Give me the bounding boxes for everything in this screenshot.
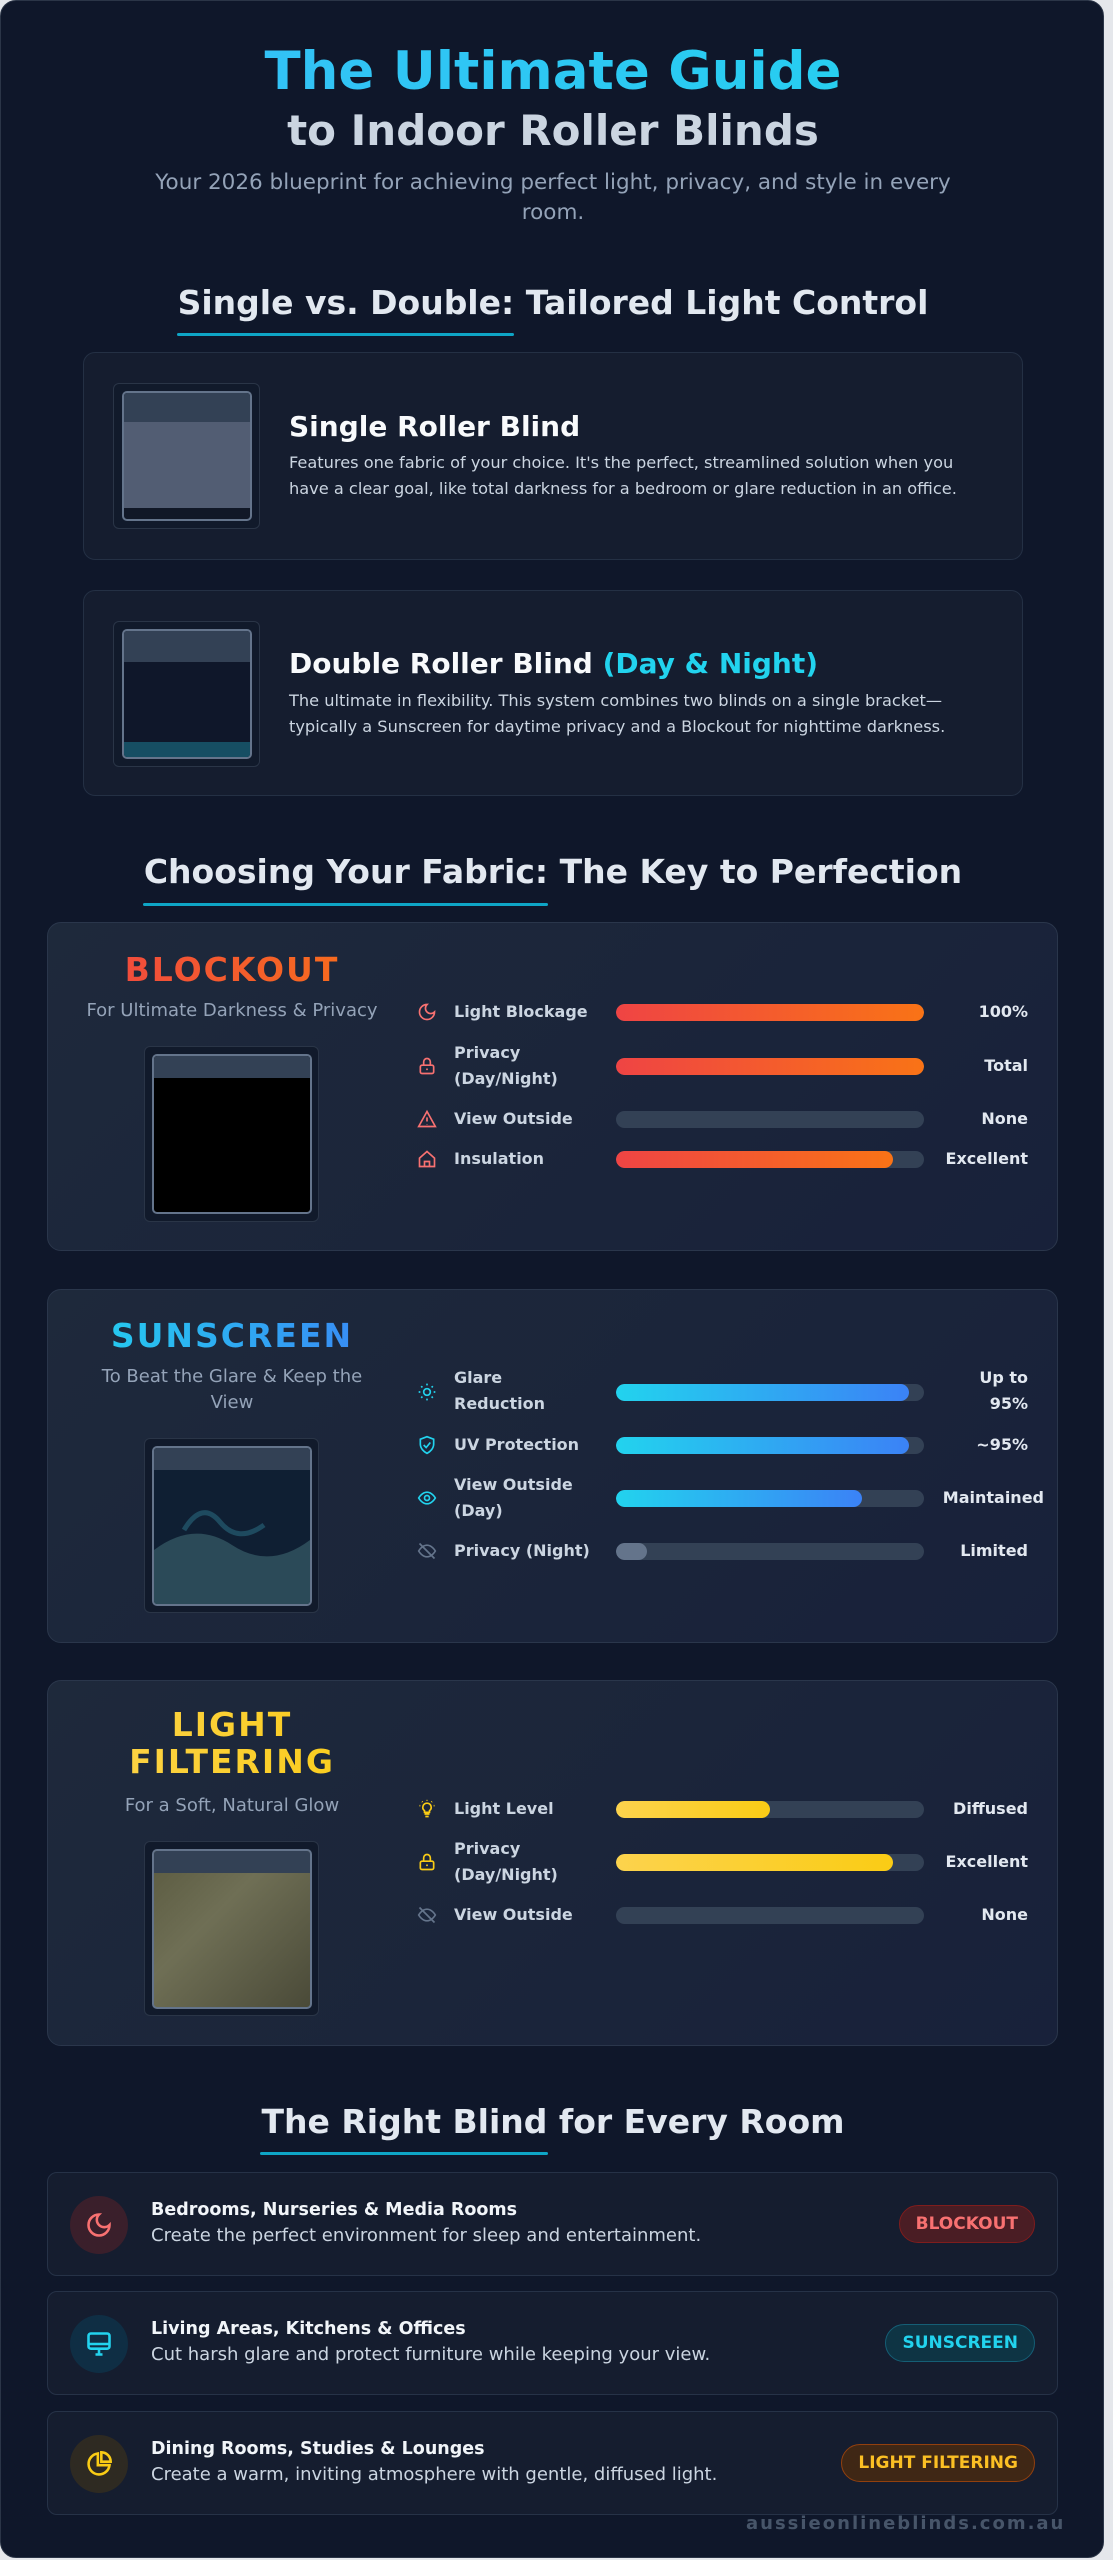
- light filtering metrics: Diffused: [953, 1799, 1028, 1818]
- icon: pie: [70, 2435, 128, 2493]
- panel: double roller blind: [83, 590, 1023, 796]
- badge: blockout: BLOCKOUT: [916, 2214, 1018, 2234]
- blockout metrics: Insulation: [454, 1149, 544, 1168]
- sunscreen image: [144, 1438, 319, 1613]
- double description: [288, 691, 945, 736]
- blockout metrics: Excellent: [946, 1149, 1028, 1168]
- room: bedrooms: Bedrooms, Nurseries & Media Rooms: [151, 2200, 517, 2220]
- badge: sunscreen: SUNSCREEN: [902, 2333, 1018, 2353]
- light filtering name: [62, 1706, 402, 1780]
- row: view day: [418, 1491, 436, 1505]
- sunscreen metrics: Privacy (Night): [454, 1541, 590, 1560]
- row: uv: [420, 1436, 434, 1454]
- intro text: [155, 170, 951, 225]
- double description: typically a Sunscreen for daytime privacy and a Blockout for nighttime darkness.: [289, 717, 945, 736]
- blockout metrics: [417, 1002, 1028, 1168]
- sunscreen subtitle: View: [211, 1392, 253, 1413]
- room: bedrooms: [47, 2172, 1058, 2276]
- sunscreen metrics: Up to: [979, 1368, 1028, 1387]
- heading: right blind for every room: The Right Blind for Every Room: [262, 2102, 844, 2141]
- blockout name: [62, 950, 402, 990]
- blockout metrics: (Day/Night): [454, 1069, 558, 1088]
- single description: [289, 453, 957, 498]
- light filtering metrics: [418, 1799, 1028, 1924]
- room: dining: Dining Rooms, Studies & Lounges: [151, 2439, 485, 2459]
- light filtering metrics: Excellent: [946, 1852, 1028, 1871]
- row: light blockage: [418, 1004, 436, 1020]
- light filtering metrics: (Day/Night): [454, 1865, 558, 1884]
- icon: single blind: [113, 383, 260, 529]
- blockout subtitle: For Ultimate Darkness & Privacy: [86, 1000, 378, 1021]
- sunscreen subtitle: [102, 1366, 362, 1413]
- row: insulation: [418, 1150, 436, 1168]
- footer url: aussieonlineblinds.com.au: [746, 2513, 1065, 2534]
- badge: sunscreen: [885, 2324, 1035, 2362]
- row: privacy: [420, 1854, 434, 1870]
- panel: sunscreen: [47, 1289, 1058, 1643]
- sunscreen subtitle: To Beat the Glare & Keep the: [102, 1366, 362, 1387]
- sunscreen metrics: UV Protection: [454, 1435, 579, 1454]
- icon: double blind: [113, 621, 260, 767]
- sunscreen metrics: 95%: [990, 1394, 1028, 1413]
- blockout metrics: Light Blockage: [454, 1002, 588, 1021]
- room: dining: [47, 2411, 1058, 2515]
- double title: Double Roller Blind (Day & Night): [289, 647, 818, 680]
- row: glare: [418, 1384, 436, 1400]
- blockout metrics: 100%: [979, 1002, 1028, 1021]
- light filtering subtitle: For a Soft, Natural Glow: [125, 1795, 339, 1816]
- room: bedrooms: Create the perfect environment for sleep and entertainment.: [151, 2225, 701, 2246]
- blockout metrics: Privacy: [454, 1043, 520, 1062]
- title: [1, 39, 1105, 105]
- badge: blockout: [899, 2205, 1035, 2243]
- single description: Features one fabric of your choice. It's the perfect, streamlined solution when you: [289, 453, 953, 472]
- sunscreen metrics: Glare: [454, 1368, 502, 1387]
- row: view outside: [417, 1110, 437, 1128]
- sunscreen metrics: ~95%: [976, 1435, 1028, 1454]
- room: living: Living Areas, Kitchens & Offices: [151, 2319, 466, 2339]
- blockout metrics: Total: [984, 1056, 1028, 1075]
- icon: monitor: [70, 2315, 128, 2373]
- room: living: [47, 2291, 1058, 2395]
- subtitle heading: to Indoor Roller Blinds: [287, 106, 819, 155]
- intro text: room.: [522, 200, 584, 225]
- panel: single roller blind: [83, 352, 1023, 560]
- blockout image: [144, 1046, 319, 1222]
- light filtering metrics: View Outside: [454, 1905, 573, 1924]
- title: The Ultimate Guide: [264, 41, 842, 102]
- sunscreen metrics: View Outside: [454, 1475, 573, 1494]
- icon: moon: [70, 2196, 128, 2254]
- panel: blockout: [47, 922, 1058, 1251]
- heading: choosing fabric: Choosing Your Fabric: The Key to Perfection: [144, 852, 962, 891]
- light filtering metrics: Light Level: [454, 1799, 554, 1818]
- light filtering name: LIGHT: [172, 1705, 292, 1744]
- blockout metrics: None: [981, 1109, 1028, 1128]
- panel: light filtering: [47, 1680, 1058, 2046]
- heading: single vs double: Single vs. Double: Tailored Light Control: [178, 283, 928, 322]
- blockout metrics: View Outside: [454, 1109, 573, 1128]
- row: privacy: [420, 1058, 434, 1074]
- double description: The ultimate in flexibility. This system combines two blinds on a single bracket—: [289, 691, 942, 710]
- sunscreen metrics: Reduction: [454, 1394, 545, 1413]
- sunscreen metrics: Maintained: [943, 1488, 1044, 1507]
- intro text: Your 2026 blueprint for achieving perfect light, privacy, and style in every: [155, 170, 951, 195]
- row: light level: [420, 1800, 434, 1818]
- sunscreen name: SUNSCREEN: [111, 1316, 353, 1355]
- row: view outside: [418, 1907, 436, 1923]
- sunscreen metrics: Limited: [960, 1541, 1028, 1560]
- light filtering metrics: None: [981, 1905, 1028, 1924]
- sunscreen metrics: [418, 1368, 1044, 1560]
- room: dining: Create a warm, inviting atmosphere with gentle, diffused light.: [151, 2464, 717, 2485]
- light filtering image: [144, 1841, 319, 2016]
- badge: light filtering: [841, 2444, 1035, 2482]
- light filtering metrics: Privacy: [454, 1839, 520, 1858]
- row: privacy night: [418, 1543, 436, 1559]
- room: living: Cut harsh glare and protect furniture while keeping your view.: [151, 2344, 710, 2365]
- blockout name: BLOCKOUT: [125, 950, 339, 989]
- light filtering name: FILTERING: [129, 1742, 335, 1781]
- badge: light filtering: LIGHT FILTERING: [858, 2453, 1018, 2473]
- single description: have a clear goal, like total darkness for a bedroom or glare reduction in an office.: [289, 479, 957, 498]
- sunscreen metrics: (Day): [454, 1501, 503, 1520]
- sunscreen name: [62, 1316, 402, 1356]
- single title: Single Roller Blind: [289, 410, 580, 443]
